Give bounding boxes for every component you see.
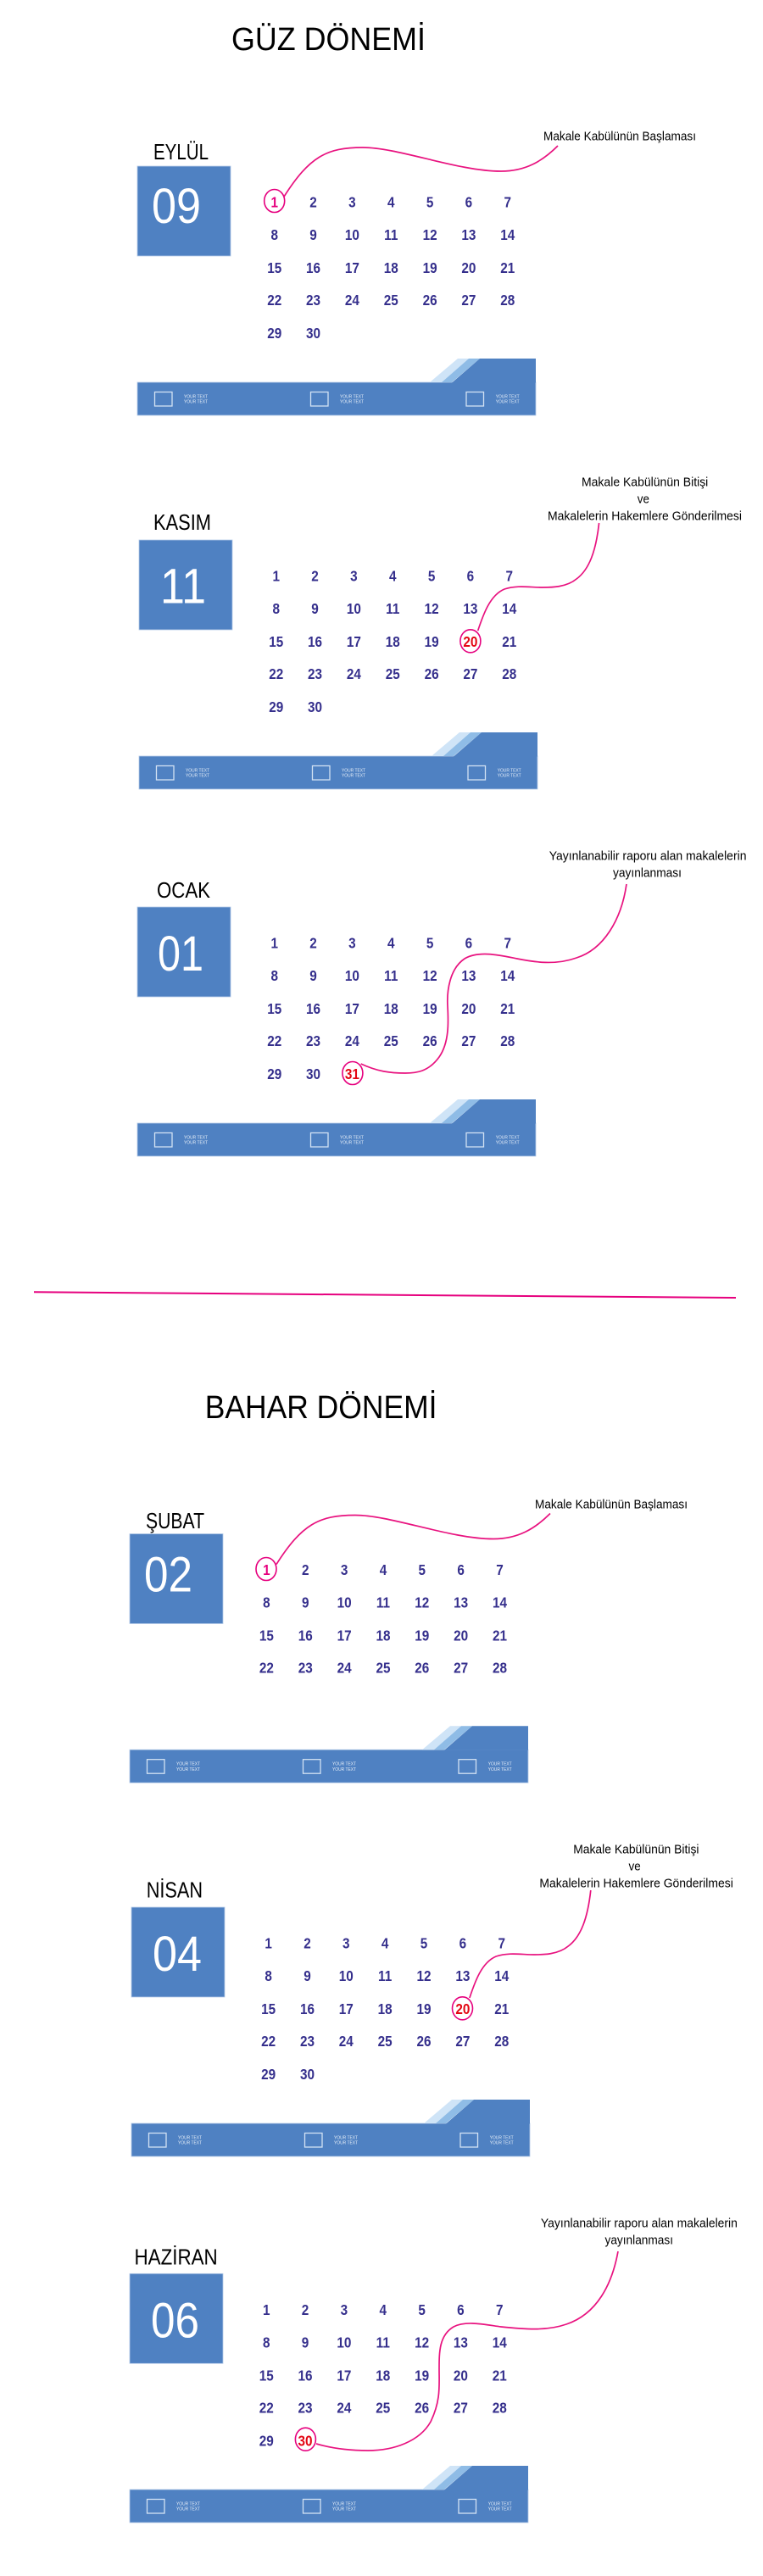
footer bar xyxy=(137,359,536,415)
day grid: 24 xyxy=(337,1660,352,1677)
day grid: 14 xyxy=(500,967,515,985)
day grid: 2 xyxy=(309,934,317,952)
day grid xyxy=(259,1561,508,1677)
day grid: 6 xyxy=(465,193,472,211)
day grid: 2 xyxy=(302,1561,309,1578)
footer bar: YOUR TEXT xyxy=(334,2141,359,2146)
day grid: 17 xyxy=(345,259,359,276)
day grid: 23 xyxy=(300,2033,315,2050)
day grid: 8 xyxy=(263,1594,270,1611)
day grid: 20 xyxy=(461,1000,476,1017)
day grid: 4 xyxy=(380,1561,387,1578)
footer bar: YOUR TEXT xyxy=(490,2135,514,2140)
month number badge: 01 xyxy=(158,926,203,982)
month number badge: 02 xyxy=(144,1547,192,1602)
day grid: 21 xyxy=(494,2000,509,2017)
day grid: 2 xyxy=(311,567,319,585)
month number badge: 06 xyxy=(151,2293,199,2348)
day grid: 10 xyxy=(347,600,361,618)
day grid: 11 xyxy=(376,2334,390,2351)
day grid: 25 xyxy=(386,665,400,683)
footer bar: YOUR TEXT xyxy=(184,1141,209,1146)
footer bar: YOUR TEXT xyxy=(332,1761,357,1766)
day grid: 17 xyxy=(339,2000,354,2017)
day grid: 18 xyxy=(376,2367,390,2384)
title: fall term: GÜZ DÖNEMİ xyxy=(231,21,426,58)
day grid: 23 xyxy=(308,665,322,683)
footer bar xyxy=(131,2100,530,2156)
day grid: 7 xyxy=(506,567,513,585)
footer bar: YOUR TEXT xyxy=(488,1767,512,1772)
month number badge xyxy=(139,540,232,630)
day grid: 21 xyxy=(500,259,515,276)
day grid: 20 xyxy=(461,259,476,276)
footer bar: YOUR TEXT xyxy=(176,2507,201,2512)
footer bar: YOUR TEXT xyxy=(176,1761,201,1766)
day grid: 2 xyxy=(302,2301,309,2318)
day grid: 16 xyxy=(306,259,320,276)
day grid: 12 xyxy=(415,2334,429,2351)
callout curve xyxy=(276,1514,550,1565)
day grid: 28 xyxy=(502,665,516,683)
day grid: 21 xyxy=(493,1627,507,1644)
day grid: 27 xyxy=(463,665,477,683)
date highlight circle xyxy=(460,630,481,653)
footer bar: YOUR TEXT xyxy=(340,400,365,405)
callout label xyxy=(541,2217,738,2247)
day grid: 22 xyxy=(269,665,283,683)
day grid: 11 xyxy=(386,600,399,618)
callout label xyxy=(548,476,742,523)
day grid: 29 xyxy=(259,2432,274,2450)
day grid: 30 xyxy=(300,2066,315,2083)
callout label xyxy=(549,850,746,881)
day grid: 30 xyxy=(306,325,320,342)
day grid: 16 xyxy=(306,1000,320,1017)
day grid: 25 xyxy=(376,1660,390,1677)
footer bar: YOUR TEXT xyxy=(332,1767,357,1772)
footer bar: YOUR TEXT xyxy=(178,2135,203,2140)
day grid: 30 xyxy=(306,1065,320,1082)
day grid xyxy=(267,934,515,1082)
day grid: 23 xyxy=(306,292,320,309)
day grid: 17 xyxy=(347,633,361,650)
month number badge: 04 xyxy=(153,1927,202,1982)
callout label: Makale Kabülünün Başlaması xyxy=(543,131,696,144)
day grid: 16 xyxy=(298,2367,313,2384)
footer bar: YOUR TEXT xyxy=(496,1141,520,1146)
day grid: 3 xyxy=(341,2301,348,2318)
footer bar: YOUR TEXT xyxy=(340,1141,365,1146)
day grid: 15 xyxy=(267,1000,281,1017)
day grid: 11 xyxy=(384,226,398,244)
day grid: 6 xyxy=(467,567,474,585)
callout label: ve xyxy=(638,492,649,506)
day grid: 5 xyxy=(426,193,433,211)
month name: OCAK xyxy=(157,877,211,903)
day grid: 11 xyxy=(378,1967,392,1985)
day grid: 25 xyxy=(378,2033,393,2050)
day grid: 3 xyxy=(343,1934,350,1952)
day grid: 28 xyxy=(500,1032,515,1050)
day grid: 9 xyxy=(304,1967,311,1985)
month number badge xyxy=(137,166,231,256)
panel: january calendar xyxy=(137,850,746,1156)
day grid: 14 xyxy=(494,1967,510,1985)
callout label: yayınlanması xyxy=(605,2234,673,2247)
day grid: 28 xyxy=(500,292,515,309)
day grid: 13 xyxy=(455,1967,470,1985)
day grid: 17 xyxy=(337,1627,352,1644)
day grid: 24 xyxy=(345,1032,360,1050)
day grid: 3 xyxy=(341,1561,348,1578)
day grid: 6 xyxy=(457,2301,465,2318)
day grid: 8 xyxy=(265,1967,272,1985)
day grid: 26 xyxy=(415,2400,429,2417)
day grid: 20 xyxy=(463,633,477,650)
day grid xyxy=(261,1934,510,2083)
day grid: 18 xyxy=(378,2000,393,2017)
footer bar: YOUR TEXT xyxy=(496,400,520,405)
footer bar: YOUR TEXT xyxy=(498,774,521,779)
day grid: 7 xyxy=(496,1561,504,1578)
day grid: 10 xyxy=(337,2334,351,2351)
day grid: 7 xyxy=(498,1934,505,1952)
day grid: 9 xyxy=(302,1594,309,1611)
day grid: 27 xyxy=(454,1660,468,1677)
date highlight circle xyxy=(256,1558,276,1580)
footer bar: YOUR TEXT xyxy=(184,400,209,405)
day grid: 1 xyxy=(272,567,280,585)
day grid: 22 xyxy=(259,2400,274,2417)
day grid: 16 xyxy=(300,2000,315,2017)
footer bar: YOUR TEXT xyxy=(184,1135,209,1140)
day grid: 4 xyxy=(387,934,395,952)
day grid: 28 xyxy=(494,2033,509,2050)
day grid: 14 xyxy=(500,226,515,244)
day grid: 13 xyxy=(454,1594,468,1611)
callout curve xyxy=(470,1890,591,1998)
day grid: 27 xyxy=(461,1032,476,1050)
day grid: 17 xyxy=(345,1000,359,1017)
day grid: 18 xyxy=(384,1000,398,1017)
day grid: 6 xyxy=(465,934,472,952)
callout curve xyxy=(361,884,627,1073)
day grid: 8 xyxy=(270,967,278,985)
day grid: 25 xyxy=(376,2400,390,2417)
day grid: 10 xyxy=(339,1967,354,1985)
callout label: Yayınlanabilir raporu alan makalelerin xyxy=(541,2217,738,2230)
month number badge xyxy=(137,907,231,997)
month name: NİSAN xyxy=(147,1877,203,1902)
day grid: 19 xyxy=(423,1000,437,1017)
panel: november calendar xyxy=(139,476,742,789)
day grid: 16 xyxy=(308,633,322,650)
day grid: 26 xyxy=(423,292,437,309)
footer bar: YOUR TEXT xyxy=(340,394,365,399)
day grid: 18 xyxy=(386,633,400,650)
callout curve xyxy=(284,146,558,197)
day grid: 18 xyxy=(376,1627,390,1644)
date highlight circle xyxy=(295,2428,315,2451)
footer bar: YOUR TEXT xyxy=(186,774,210,779)
day grid: 20 xyxy=(454,2367,468,2384)
day grid: 9 xyxy=(309,967,317,985)
date highlight circle xyxy=(453,1997,473,2020)
day grid: 13 xyxy=(461,226,476,244)
callout label: Makale Kabülünün Bitişi xyxy=(582,476,708,489)
day grid: 24 xyxy=(337,2400,352,2417)
panel: september calendar xyxy=(137,131,696,415)
footer bar: YOUR TEXT xyxy=(340,1135,365,1140)
day grid: 20 xyxy=(454,1627,468,1644)
day grid: 27 xyxy=(461,292,476,309)
callout curve xyxy=(316,2251,618,2451)
callout label: ve xyxy=(629,1861,641,1874)
day grid: 6 xyxy=(457,1561,465,1578)
footer bar: YOUR TEXT xyxy=(334,2135,359,2140)
day grid xyxy=(267,193,515,342)
callout label: Makale Kabülünün Başlaması xyxy=(535,1499,688,1512)
footer bar: YOUR TEXT xyxy=(490,2141,514,2146)
day grid: 13 xyxy=(454,2334,468,2351)
day grid: 5 xyxy=(418,2301,426,2318)
month name: HAZİRAN xyxy=(134,2245,218,2270)
day grid: 3 xyxy=(348,193,356,211)
day grid: 19 xyxy=(415,1627,429,1644)
footer bar: YOUR TEXT xyxy=(184,394,209,399)
day grid xyxy=(259,2301,507,2450)
day grid: 30 xyxy=(298,2432,313,2450)
footer bar: YOUR TEXT xyxy=(176,2501,201,2506)
day grid: 22 xyxy=(259,1660,274,1677)
footer bar: YOUR TEXT xyxy=(488,1761,512,1766)
day grid: 27 xyxy=(454,2400,468,2417)
callout label xyxy=(539,1844,733,1891)
day grid: 14 xyxy=(493,2334,507,2351)
month number badge xyxy=(130,1534,223,1624)
day grid: 21 xyxy=(502,633,516,650)
footer bar xyxy=(130,1726,528,1783)
day grid: 29 xyxy=(261,2066,276,2083)
title: spring term: BAHAR DÖNEMİ xyxy=(205,1389,437,1426)
callout label: Yayınlanabilir raporu alan makalelerin xyxy=(549,850,746,864)
day grid: 18 xyxy=(384,259,398,276)
footer bar: YOUR TEXT xyxy=(332,2501,357,2506)
footer bar xyxy=(130,2466,528,2523)
day grid: 5 xyxy=(419,1561,426,1578)
day grid: 9 xyxy=(309,226,317,244)
panel: february calendar xyxy=(130,1499,688,1783)
day grid: 15 xyxy=(261,2000,276,2017)
month name: ŞUBAT xyxy=(146,1508,204,1533)
footer bar xyxy=(139,732,537,789)
footer bar: YOUR TEXT xyxy=(488,2501,512,2506)
day grid: 6 xyxy=(459,1934,466,1952)
day grid: 30 xyxy=(308,698,322,715)
day grid: 10 xyxy=(345,967,359,985)
day grid: 24 xyxy=(345,292,360,309)
day grid: 23 xyxy=(298,2400,313,2417)
day grid: 24 xyxy=(347,665,362,683)
panel: april calendar xyxy=(131,1844,733,2156)
day grid: 15 xyxy=(269,633,283,650)
day grid: 10 xyxy=(337,1594,352,1611)
day grid: 29 xyxy=(267,1065,281,1082)
day grid: 1 xyxy=(263,2301,270,2318)
day grid: 25 xyxy=(384,292,398,309)
footer bar: YOUR TEXT xyxy=(332,2507,357,2512)
day grid: 15 xyxy=(259,2367,274,2384)
day grid: 28 xyxy=(493,2400,507,2417)
day grid: 5 xyxy=(426,934,433,952)
footer bar: YOUR TEXT xyxy=(186,768,210,773)
day grid: 22 xyxy=(267,1032,281,1050)
day grid: 23 xyxy=(306,1032,320,1050)
footer bar: YOUR TEXT xyxy=(176,1767,201,1772)
day grid: 10 xyxy=(345,226,359,244)
day grid xyxy=(269,567,517,715)
day grid: 26 xyxy=(416,2033,431,2050)
day grid: 17 xyxy=(337,2367,351,2384)
day grid: 19 xyxy=(425,633,439,650)
day grid: 4 xyxy=(382,1934,389,1952)
day grid: 3 xyxy=(348,934,356,952)
day grid: 4 xyxy=(387,193,395,211)
month name: KASIM xyxy=(153,509,211,535)
callout label: Makale Kabülünün Bitişi xyxy=(573,1844,699,1857)
day grid: 5 xyxy=(428,567,435,585)
day grid: 13 xyxy=(461,967,476,985)
day grid: 1 xyxy=(270,193,278,211)
day grid: 3 xyxy=(350,567,358,585)
month number badge xyxy=(130,2273,223,2363)
panel: june calendar xyxy=(130,2217,738,2523)
footer bar: YOUR TEXT xyxy=(498,768,521,773)
day grid: 28 xyxy=(493,1660,507,1677)
day grid: 8 xyxy=(272,600,280,618)
day grid: 15 xyxy=(259,1627,274,1644)
day grid: 7 xyxy=(496,2301,504,2318)
day grid: 12 xyxy=(425,600,439,618)
day grid: 12 xyxy=(423,967,437,985)
day grid: 19 xyxy=(423,259,437,276)
callout label: Makalelerin Hakemlere Gönderilmesi xyxy=(548,509,742,523)
month number badge: 11 xyxy=(160,559,206,615)
day grid: 31 xyxy=(345,1065,359,1082)
day grid: 7 xyxy=(504,193,511,211)
day grid: 2 xyxy=(304,1934,311,1952)
footer bar: YOUR TEXT xyxy=(342,774,366,779)
month name: EYLÜL xyxy=(153,139,209,164)
date highlight circle xyxy=(265,190,285,212)
day grid: 1 xyxy=(270,934,278,952)
day grid: 13 xyxy=(463,600,477,618)
day grid: 27 xyxy=(455,2033,470,2050)
day grid: 21 xyxy=(500,1000,515,1017)
day grid: 15 xyxy=(267,259,281,276)
day grid: 12 xyxy=(423,226,437,244)
day grid: 26 xyxy=(423,1032,437,1050)
day grid: 24 xyxy=(339,2033,354,2050)
day grid: 9 xyxy=(311,600,319,618)
day grid: 16 xyxy=(298,1627,313,1644)
callout curve xyxy=(478,523,599,631)
footer bar: YOUR TEXT xyxy=(496,394,520,399)
day grid: 12 xyxy=(415,1594,429,1611)
day grid: 11 xyxy=(384,967,398,985)
day grid: 4 xyxy=(379,2301,387,2318)
day grid: 29 xyxy=(267,325,281,342)
callout label: yayınlanması xyxy=(613,867,682,881)
footer bar: YOUR TEXT xyxy=(178,2141,203,2146)
day grid: 7 xyxy=(504,934,511,952)
callout label: Makalelerin Hakemlere Gönderilmesi xyxy=(539,1878,733,1891)
day grid: 4 xyxy=(389,567,397,585)
day grid: 23 xyxy=(298,1660,313,1677)
day grid: 22 xyxy=(261,2033,276,2050)
day grid: 14 xyxy=(502,600,517,618)
day grid: 9 xyxy=(302,2334,309,2351)
day grid: 8 xyxy=(263,2334,270,2351)
footer bar: YOUR TEXT xyxy=(488,2507,512,2512)
day grid: 11 xyxy=(376,1594,390,1611)
day grid: 25 xyxy=(384,1032,398,1050)
day grid: 29 xyxy=(269,698,283,715)
day grid: 19 xyxy=(415,2367,429,2384)
day grid: 1 xyxy=(265,1934,272,1952)
day grid: 26 xyxy=(425,665,439,683)
day grid: 14 xyxy=(493,1594,508,1611)
day grid: 20 xyxy=(455,2000,470,2017)
footer bar: YOUR TEXT xyxy=(496,1135,520,1140)
day grid: 5 xyxy=(420,1934,427,1952)
footer bar: YOUR TEXT xyxy=(342,768,366,773)
day grid: 2 xyxy=(309,193,317,211)
day grid: 8 xyxy=(270,226,278,244)
day grid: 22 xyxy=(267,292,281,309)
month number badge: 09 xyxy=(152,179,201,234)
day grid: 12 xyxy=(416,1967,431,1985)
day grid: 1 xyxy=(263,1561,270,1578)
day grid: 19 xyxy=(416,2000,431,2017)
separator line xyxy=(34,1292,736,1298)
day grid: 21 xyxy=(493,2367,507,2384)
month number badge xyxy=(131,1907,225,1997)
date highlight circle xyxy=(343,1061,363,1085)
day grid: 26 xyxy=(415,1660,429,1677)
footer bar xyxy=(137,1099,536,1156)
